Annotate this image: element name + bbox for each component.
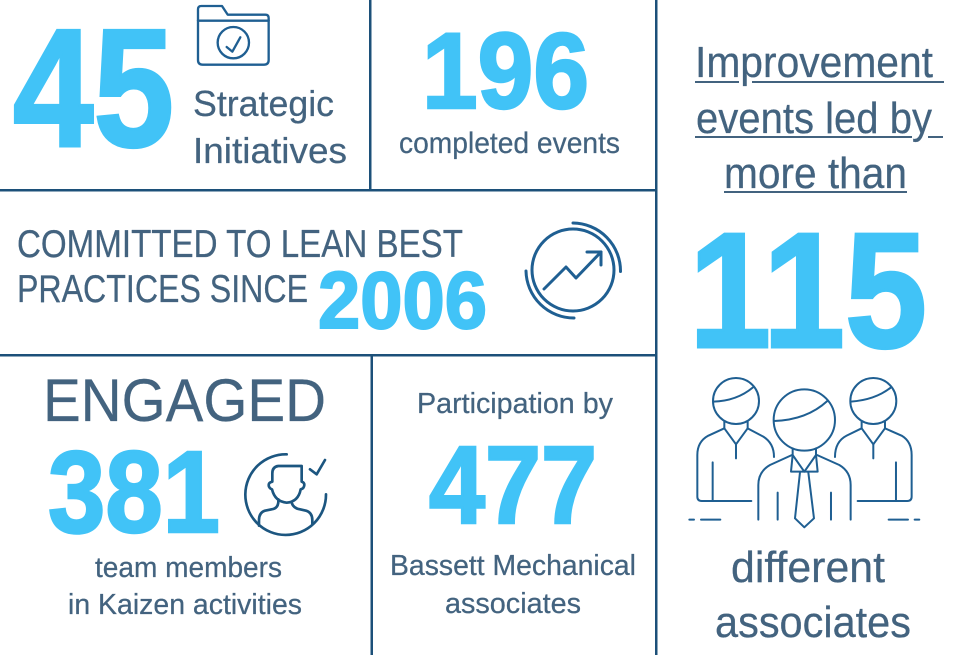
- label: different associates: associates: [715, 598, 911, 647]
- number 196: 196: [422, 10, 589, 131]
- label: team members: [68, 552, 302, 621]
- icon: three associates: [689, 378, 919, 527]
- panel: participation: [390, 388, 636, 620]
- heading: committed to lean: COMMITTED TO LEAN BEST: [17, 223, 463, 266]
- number 381: 381: [48, 427, 220, 557]
- label: different associates: different: [731, 543, 885, 592]
- label: Bassett Mechanical associates: Bassett Mechanical: [390, 550, 636, 582]
- panel: strategic initiatives: [13, 0, 347, 182]
- label: completed events: completed events: [399, 127, 620, 160]
- icon: person in circle with check: [245, 454, 326, 535]
- icon: growth chart in circle: [526, 223, 621, 318]
- label: Strategic Initiatives: [193, 83, 347, 171]
- number 2006: 2006: [318, 256, 487, 346]
- panel: engaged team members: [43, 367, 326, 621]
- label: Participation by: Participation by: [417, 388, 613, 420]
- heading: improvement events led by more than: [695, 38, 944, 198]
- heading: improvement events led by more than: more than: [724, 149, 907, 198]
- panel: improvement events: [689, 38, 944, 647]
- label: team members: in Kaizen activities: [68, 589, 302, 621]
- label: Strategic Initiatives: Strategic: [193, 83, 334, 124]
- number 115: 115: [689, 199, 927, 382]
- heading: improvement events led by more than: events led by: [696, 94, 932, 143]
- heading: improvement events led by more than: Improvement: [695, 38, 933, 87]
- label: Strategic Initiatives: Initiatives: [193, 130, 347, 171]
- label: Bassett Mechanical associates: associates: [445, 588, 581, 620]
- panel: completed events: [399, 10, 620, 160]
- label: different associates: [715, 543, 911, 647]
- heading: committed to lean: PRACTICES SINCE: [17, 268, 308, 311]
- label: team members: team members: [95, 552, 282, 584]
- heading: committed to lean: [17, 223, 463, 311]
- number 477: 477: [429, 424, 597, 547]
- panel: lean best practices: [17, 223, 621, 346]
- icon: folder with check: [198, 6, 269, 65]
- label: Bassett Mechanical associates: [390, 550, 636, 620]
- heading: ENGAGED: ENGAGED: [43, 367, 326, 434]
